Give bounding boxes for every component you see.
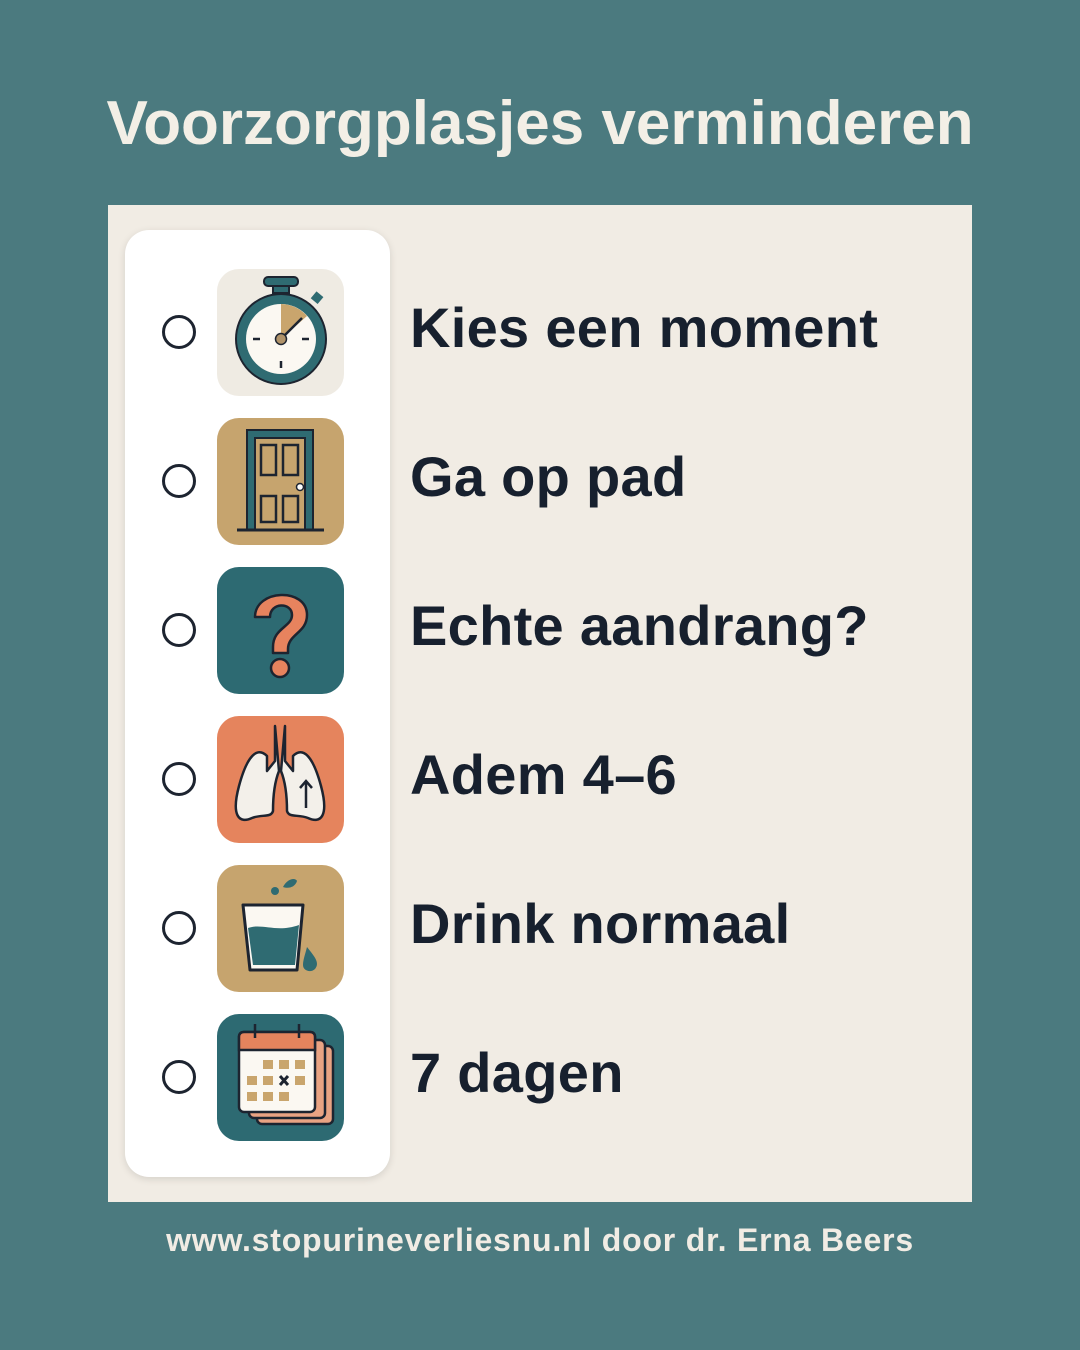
row 5 xyxy=(162,865,790,992)
label: Kies een moment xyxy=(410,296,878,359)
row 2 xyxy=(162,418,686,545)
icon: calendar xyxy=(217,1014,344,1141)
icon: question mark xyxy=(217,567,344,694)
row 3 xyxy=(162,567,869,694)
row 4: Adem 4–6 xyxy=(410,743,677,806)
icon: door xyxy=(217,418,344,545)
row 1 xyxy=(162,269,878,396)
row 6 xyxy=(162,1014,624,1141)
row 4 xyxy=(162,716,677,843)
title: Voorzorgplasjes verminderen xyxy=(106,89,974,158)
row 5: Drink normaal xyxy=(410,892,790,955)
row 2: Ga op pad xyxy=(410,445,686,508)
row 6: 7 dagen xyxy=(410,1041,624,1104)
icon: lungs xyxy=(217,716,344,843)
row 3: Echte aandrang? xyxy=(410,594,869,657)
icon: stopwatch xyxy=(217,269,344,396)
card: icons column xyxy=(125,230,390,1177)
panel: checklist background xyxy=(108,205,972,1202)
icon: water glass xyxy=(217,865,344,992)
footer: www.stopurineverliesnu.nl door dr. Erna Beers xyxy=(166,1222,914,1258)
